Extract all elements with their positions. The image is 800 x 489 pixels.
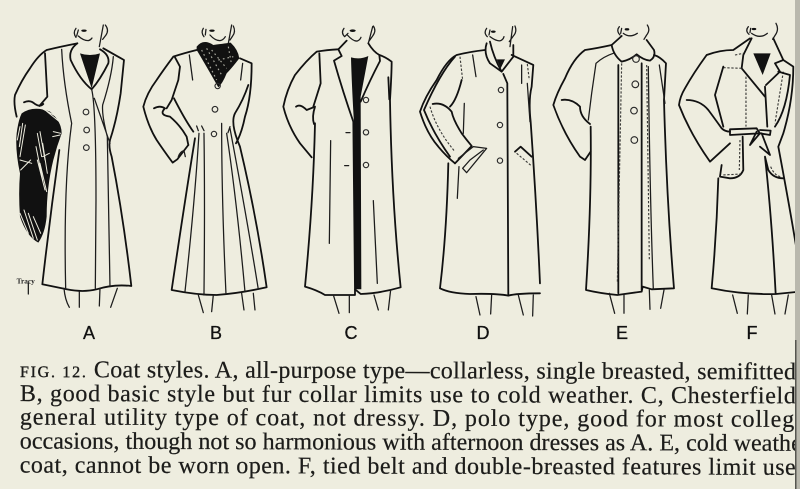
coats E and F — [553, 23, 800, 314]
caption: B, good basic style but fur collar limits use to cold weather. C, Chesterfield — [20, 381, 796, 409]
coat letters: A — [83, 323, 95, 343]
coats C and D — [283, 26, 540, 316]
page gutter edge — [795, 0, 800, 489]
coat D — [420, 26, 540, 316]
coat letters — [83, 323, 758, 343]
coat B — [143, 25, 267, 313]
caption — [20, 357, 800, 481]
coat letters: E — [616, 323, 628, 343]
caption: occasions, though not so harmonious with afternoon dresses as A. E, cold weather — [20, 428, 800, 457]
coat C — [283, 26, 401, 313]
coat F — [679, 23, 800, 314]
coat letters: F — [746, 323, 758, 343]
signature — [17, 276, 35, 294]
caption: general utility type of coat, not dressy. D, polo type, good for most college — [20, 404, 800, 433]
coat letters: B — [210, 323, 222, 343]
coat E — [553, 25, 674, 313]
coat letters: D — [476, 323, 490, 343]
coat A — [14, 25, 131, 307]
coat letters: C — [344, 323, 358, 343]
signature: Tracy — [17, 276, 35, 285]
caption: coat, cannot be worn open. F, tied belt and double-breasted features limit use — [20, 452, 796, 481]
caption: FIG. 12. Coat styles. A, all-purpose type—collarless, single breasted, semifitted — [20, 357, 796, 385]
coats A and B — [14, 25, 267, 313]
